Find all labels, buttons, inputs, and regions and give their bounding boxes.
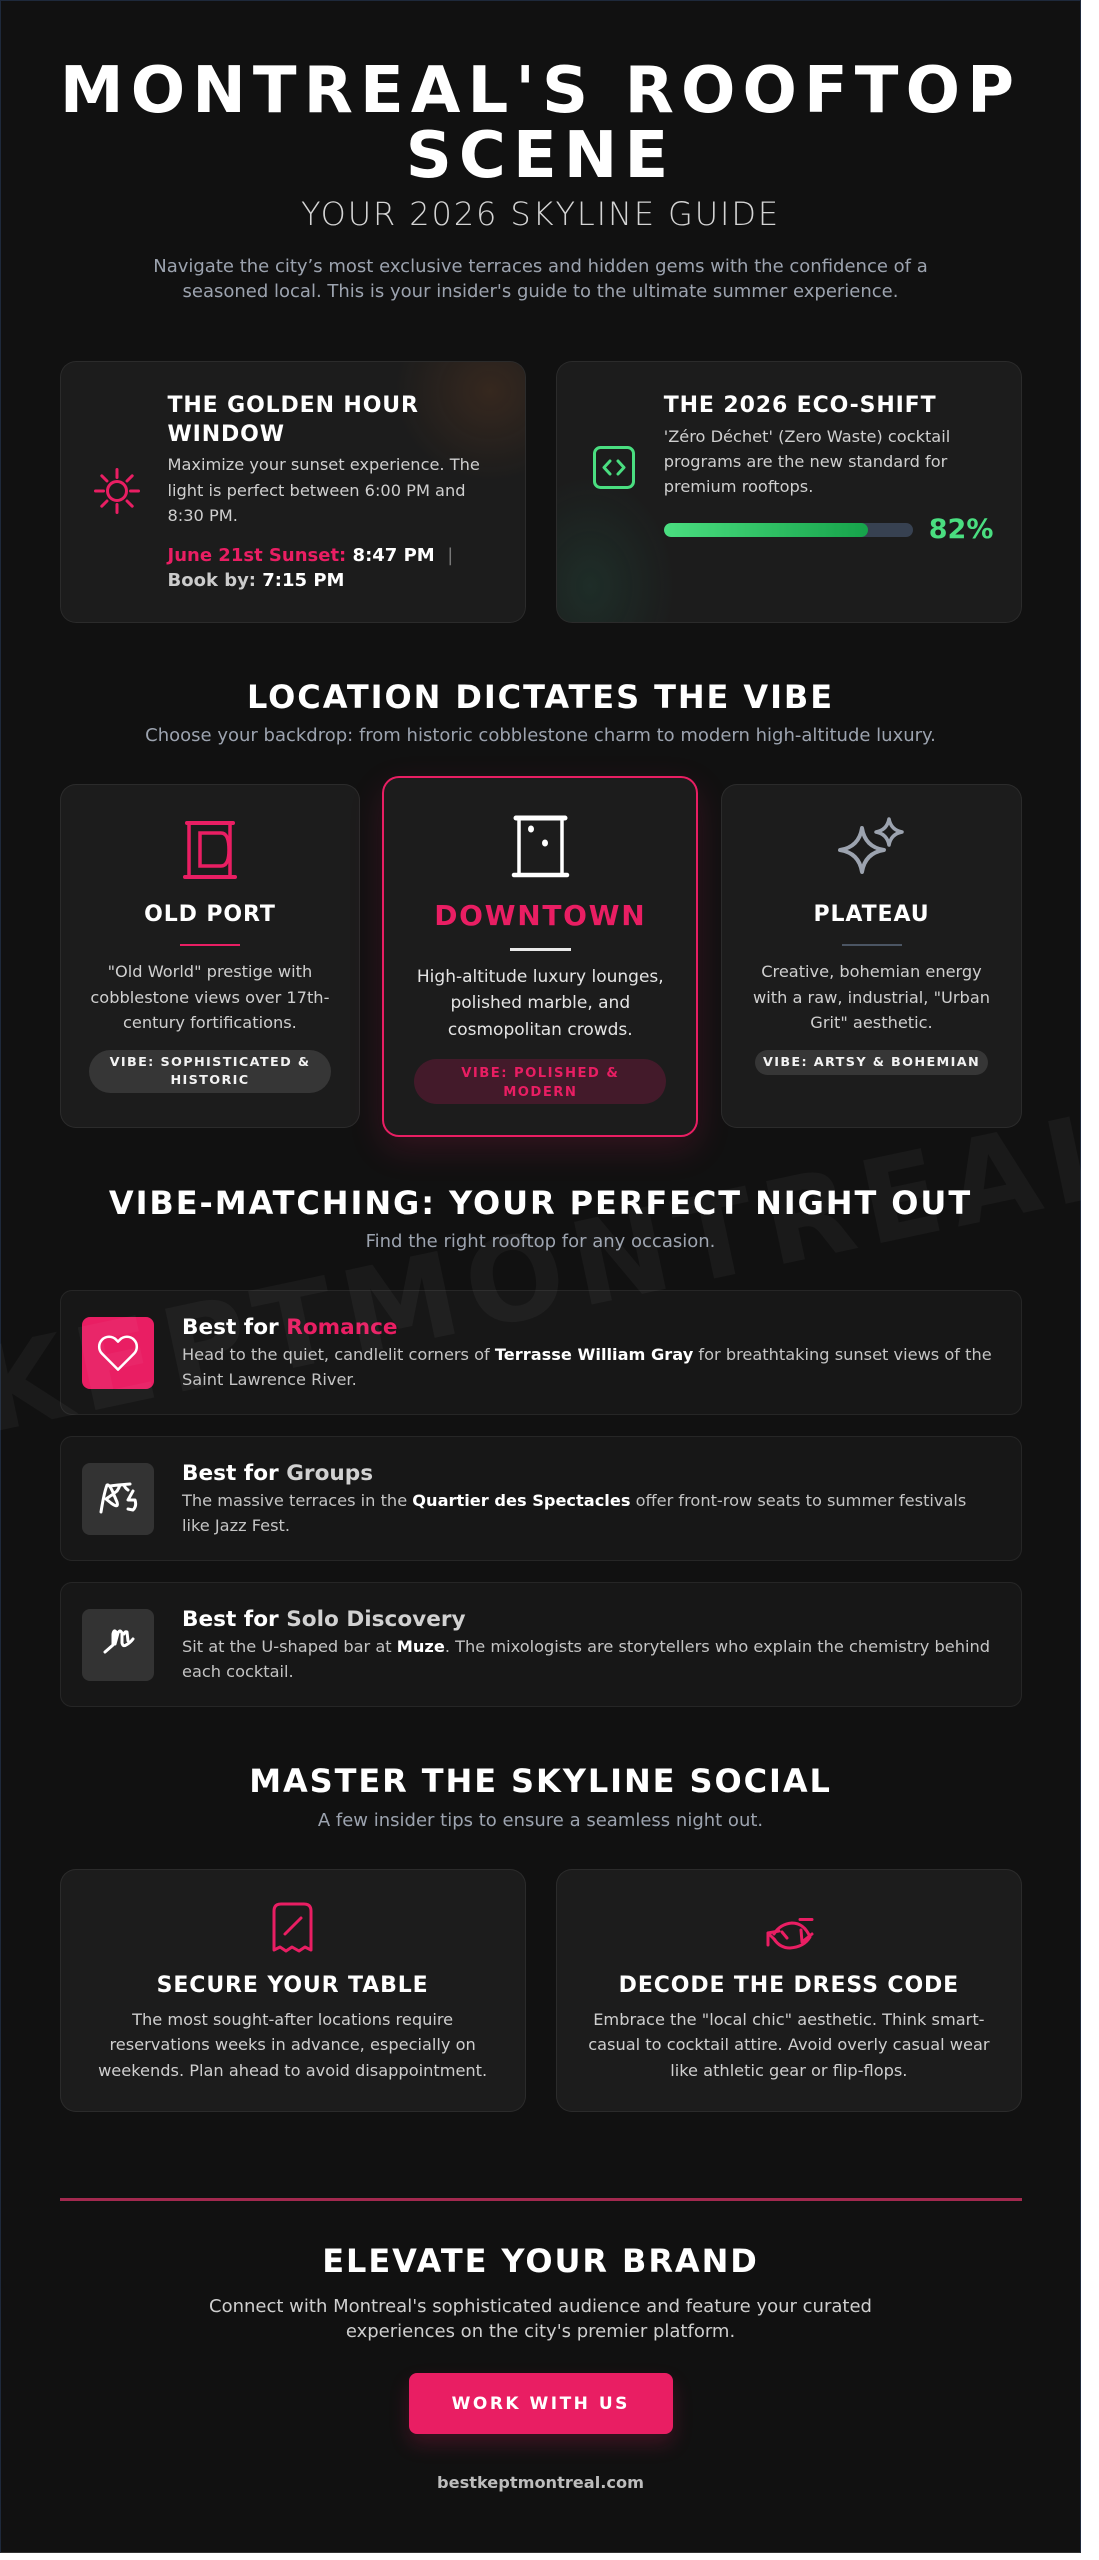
vibe tag: [755, 1050, 988, 1075]
vibe tag: HISTORIC: [170, 1073, 250, 1088]
panel: eco shift: [556, 361, 1022, 622]
call to action text: experiences on the city's premier platform.: [346, 2321, 735, 2342]
divider: [510, 948, 571, 951]
body text: [98, 2010, 487, 2080]
title: MONTREAL'S ROOFTOP: [60, 54, 1021, 128]
panel: romance: [60, 1290, 1022, 1414]
body text: light is perfect between 6:00 PM and: [168, 481, 466, 500]
body text: 8:30 PM.: [168, 506, 238, 525]
website: bestkeptmontreal.com: [437, 2473, 644, 2492]
heading: Best for Groups: [182, 1460, 373, 1486]
description: century fortifications.: [123, 1013, 297, 1032]
heading: [168, 392, 419, 446]
body text: [182, 1636, 990, 1681]
title: SCENE: [406, 119, 675, 193]
call to action text: Connect with Montreal's sophisticated audience and feature your curated: [209, 2296, 872, 2316]
description: [417, 967, 664, 1040]
body text: each cocktail.: [182, 1662, 294, 1681]
body text: Head to the quiet, candlelit corners of Terrasse William Gray for breathtaking sunset views of the: [182, 1344, 992, 1364]
description: "Old World" prestige with: [108, 962, 312, 981]
heading: location: LOCATION DICTATES THE VIBE: [247, 678, 834, 716]
description: Grit" aesthetic.: [810, 1013, 933, 1032]
heading: Best for Romance: [182, 1314, 398, 1340]
panel: solo: [60, 1582, 1022, 1706]
heading: WINDOW: [168, 422, 285, 446]
vibe tag: [89, 1050, 331, 1093]
body text: Embrace the "local chic" aesthetic. Think smart-: [593, 2010, 985, 2028]
subheading: skyline social: A few insider tips to ensure a seamless night out.: [318, 1810, 763, 1830]
divider: [842, 944, 902, 946]
vibe tag: VIBE: ARTSY & BOHEMIAN: [763, 1054, 980, 1070]
description: cosmopolitan crowds.: [448, 1020, 633, 1040]
divider: [180, 944, 240, 946]
description: High-altitude luxury lounges,: [417, 967, 664, 987]
body text: [182, 1344, 992, 1389]
sunset times: [166, 545, 453, 591]
body text: premium rooftops.: [664, 477, 813, 496]
vibe tag: [414, 1059, 666, 1104]
body text: casual to cocktail attire. Avoid overly casual wear: [588, 2035, 990, 2054]
button: WORK WITH US: [452, 2394, 630, 2414]
description: polished marble, and: [450, 993, 630, 1013]
description: cobblestone views over 17th-: [90, 988, 329, 1007]
heading: THE GOLDEN HOUR: [168, 392, 419, 418]
heading: Best for Solo Discovery: [182, 1606, 466, 1632]
description: Creative, bohemian energy: [761, 962, 982, 981]
body text: The massive terraces in the Quartier des Spectacles offer front-row seats to summer festivals: [182, 1490, 966, 1510]
body text: reservations weeks in advance, especially on: [109, 2035, 476, 2054]
icon: old port: [183, 821, 237, 879]
heading: elevate your brand: ELEVATE YOUR BRAND: [322, 2242, 759, 2280]
vibe tag: VIBE: POLISHED &: [461, 1066, 619, 1080]
intro text: Navigate the city’s most exclusive terraces and hidden gems with the confidence of a: [153, 256, 928, 277]
body text: like athletic gear or flip-flops.: [670, 2060, 907, 2080]
icon: heart: [82, 1316, 154, 1388]
icon: receipt: [272, 1902, 312, 1952]
footer rule: [60, 2198, 1022, 2200]
description: [90, 962, 329, 1032]
sunset times: June 21st Sunset: 8:47 PM |: [168, 545, 453, 566]
body text: 'Zéro Déchet' (Zero Waste) cocktail: [664, 426, 950, 446]
body text: Sit at the U-shaped bar at Muze. The mixologists are storytellers who explain the chemistry behind: [182, 1636, 990, 1656]
percent value: 82%: [929, 514, 993, 545]
intro text: [153, 256, 928, 302]
heading: SECURE YOUR TABLE: [157, 1973, 429, 1998]
body text: [168, 455, 480, 525]
button: [408, 2373, 673, 2434]
title: [60, 54, 1021, 193]
body text: [182, 1490, 966, 1535]
vibe tag: VIBE: SOPHISTICATED &: [110, 1055, 310, 1070]
icon: code box: [593, 446, 635, 489]
panel: dress code: [556, 1868, 1022, 2112]
icon: groups: [82, 1462, 154, 1534]
heading: vibe matching: VIBE-MATCHING: YOUR PERFECT NIGHT OUT: [109, 1184, 972, 1222]
subheading: vibe matching: Find the right rooftop for any occasion.: [366, 1231, 715, 1252]
intro text: seasoned local. This is your insider's guide to the ultimate summer experience.: [183, 281, 898, 302]
icon: downtown: [512, 816, 570, 878]
heading: THE 2026 ECO-SHIFT: [664, 392, 936, 418]
heading: DECODE THE DRESS CODE: [619, 1973, 959, 1998]
body text: The most sought-after locations require: [132, 2010, 453, 2028]
description: [753, 962, 990, 1032]
subheading: location: Choose your backdrop: from historic cobblestone charm to modern high-altitude luxury.: [145, 725, 936, 746]
icon: dress code: [766, 1918, 814, 1950]
panel: groups: [60, 1436, 1022, 1560]
name: DOWNTOWN: [434, 898, 646, 932]
body text: [588, 2010, 990, 2080]
heading: skyline social: MASTER THE SKYLINE SOCIAL: [249, 1762, 832, 1800]
name: OLD PORT: [144, 902, 276, 927]
body text: [664, 426, 950, 496]
panel: golden hour: [60, 361, 526, 622]
name: PLATEAU: [813, 902, 930, 927]
description: with a raw, industrial, "Urban: [753, 988, 990, 1007]
subtitle: YOUR 2026 SKYLINE GUIDE: [301, 194, 780, 232]
progress bar: [664, 522, 913, 537]
body text: Saint Lawrence River.: [182, 1370, 357, 1389]
body text: like Jazz Fest.: [182, 1516, 290, 1535]
call to action text: [209, 2296, 872, 2342]
panel: plateau: [721, 784, 1022, 1128]
icon: sun: [94, 468, 140, 514]
body text: programs are the new standard for: [664, 452, 947, 471]
panel: secure your table: [60, 1868, 526, 2112]
sunset times: Book by: 7:15 PM: [168, 570, 344, 591]
body text: Maximize your sunset experience. The: [168, 455, 480, 474]
panel: old port: [60, 784, 360, 1128]
vibe tag: MODERN: [503, 1084, 577, 1100]
panel: downtown: [382, 776, 698, 1137]
icon: sparkles: [838, 817, 904, 874]
body text: weekends. Plan ahead to avoid disappointment.: [98, 2060, 487, 2080]
icon: solo: [82, 1608, 154, 1680]
